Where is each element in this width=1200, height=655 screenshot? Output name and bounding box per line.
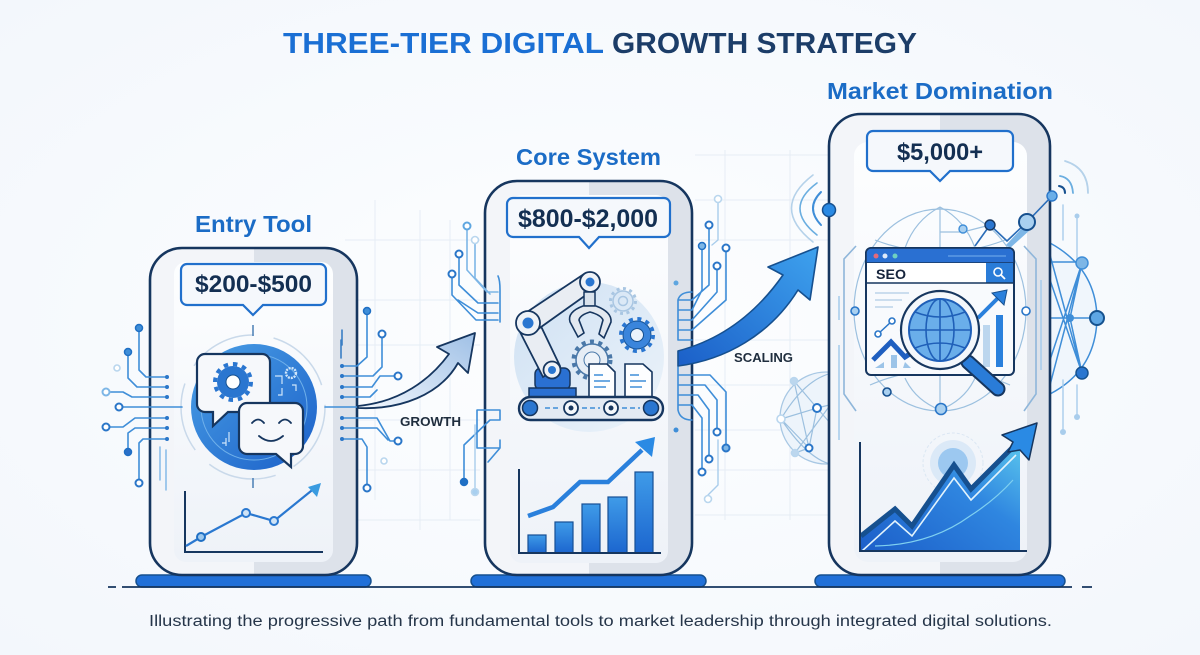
- circuit traces: entry tool left: [102, 324, 182, 490]
- icon: chat bubbles on blue disc: [181, 325, 325, 488]
- arrow: growth: [358, 333, 475, 408]
- device frame: entry tool: [150, 248, 357, 575]
- illustration: robot arm on conveyor: [514, 272, 664, 432]
- circuit traces: entry tool right: [325, 308, 402, 492]
- heading: entry tool: Entry Tool: [195, 211, 312, 237]
- base plate: entry tool: [136, 575, 371, 587]
- title: [283, 28, 917, 60]
- title: GROWTH STRATEGY: [612, 28, 917, 60]
- title: THREE-TIER DIGITAL: [283, 28, 604, 60]
- label: growth: GROWTH: [400, 414, 461, 429]
- price tag: entry tool: $200-$500: [195, 271, 312, 298]
- illustration: SEO browser window: SEO: [876, 266, 906, 282]
- panel: core system: [471, 144, 706, 587]
- right globe network: [1050, 205, 1104, 435]
- caption: Illustrating the progressive path from fundamental tools to market leadership through integrated digital solutions.: [149, 613, 1052, 630]
- label: scaling: SCALING: [734, 350, 793, 365]
- base plate: market domination: [815, 575, 1065, 587]
- arrow: scaling: [678, 247, 818, 366]
- heading: core system: Core System: [516, 144, 661, 170]
- illustration: SEO browser window: [866, 248, 1014, 375]
- icon: magnifier with globe: [901, 291, 998, 389]
- illustration: globe wireframe: [839, 207, 1041, 440]
- base plate: core system: [471, 575, 706, 587]
- panel: market domination: [792, 78, 1088, 587]
- ground line: [108, 586, 1092, 588]
- device frame: core system: [485, 181, 692, 575]
- price tag: core system: [507, 198, 670, 248]
- area chart: market domination: [860, 423, 1037, 551]
- circuit traces: core system right: [674, 196, 730, 502]
- icon: signal waves left: [792, 175, 836, 242]
- panel: entry tool: [136, 211, 371, 587]
- price tag: market domination: [867, 131, 1013, 181]
- heading: market domination: Market Domination: [827, 78, 1053, 104]
- illustration: network trend above browser: [940, 191, 1057, 248]
- device frame: market domination: [829, 114, 1050, 575]
- circuit traces: core system left: [448, 222, 500, 496]
- left globe network: [777, 372, 872, 465]
- icon: signal waves right: [1059, 161, 1088, 193]
- line chart: entry tool: [185, 483, 323, 552]
- price tag: entry tool: [181, 264, 326, 315]
- price tag: market domination: $5,000+: [897, 139, 983, 166]
- bar chart: core system: [519, 437, 661, 553]
- price tag: core system: $800-$2,000: [518, 205, 658, 233]
